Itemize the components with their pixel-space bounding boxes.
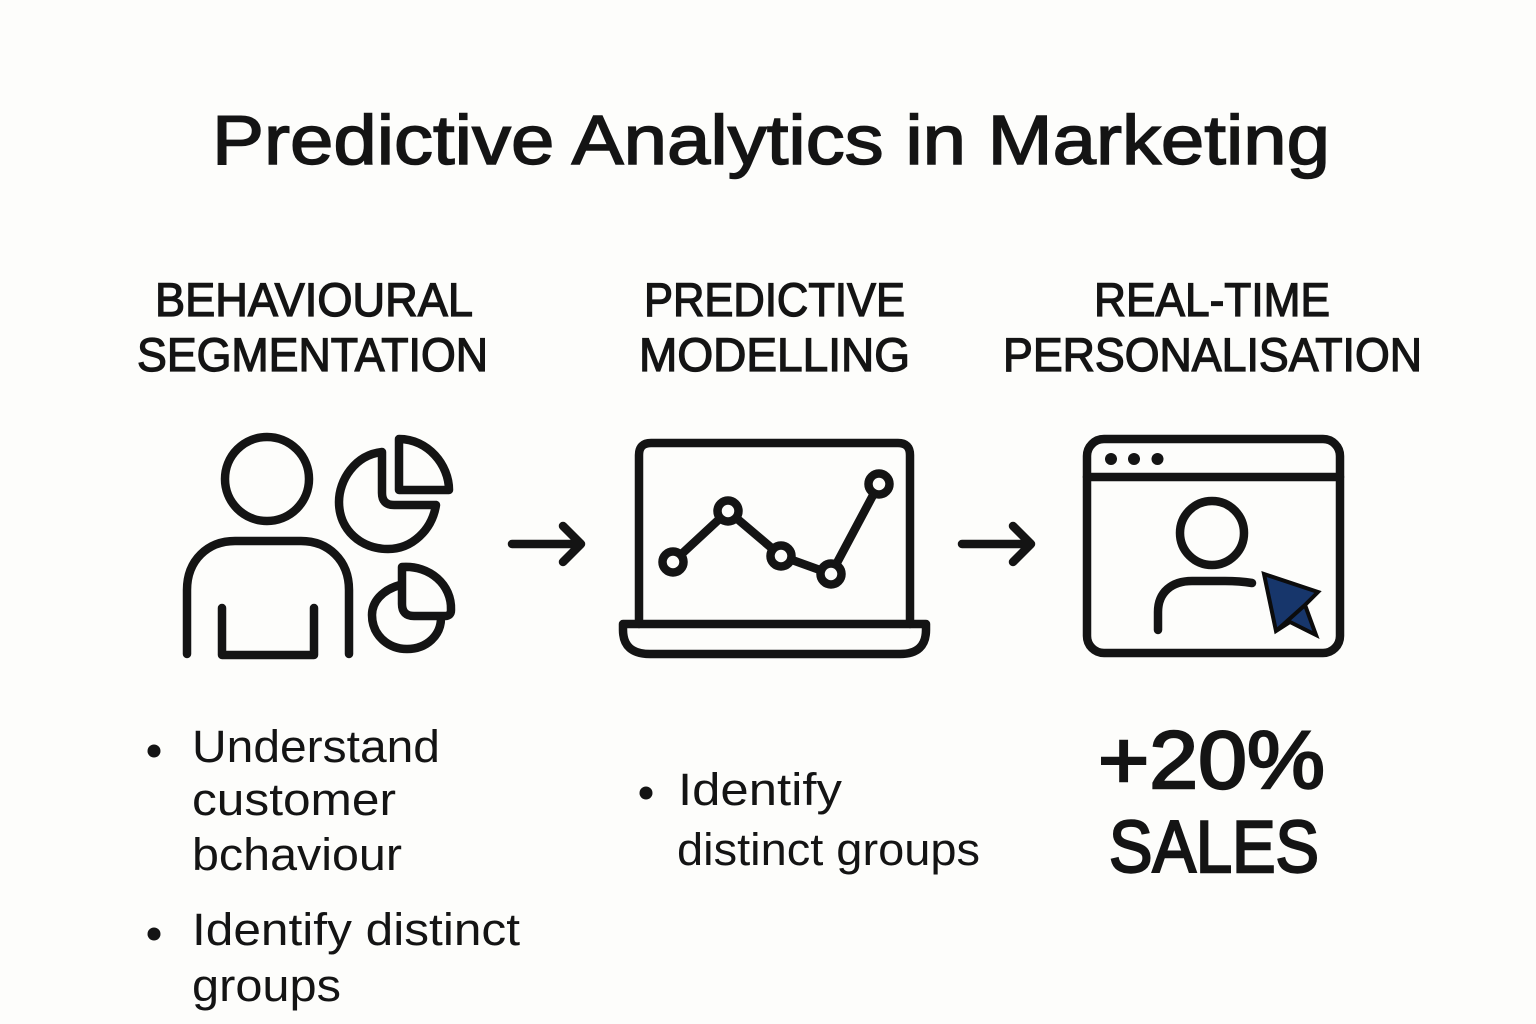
heading: predictive modelling xyxy=(639,273,910,381)
bullet text: identify distinct groups: Identify xyxy=(678,764,843,815)
bullet text: understand customer behaviour xyxy=(192,721,440,880)
large pie chart xyxy=(339,452,436,549)
small pie chart xyxy=(372,585,441,649)
bullet text: understand customer behaviour: Understand xyxy=(192,721,440,772)
person head xyxy=(225,437,309,521)
icon: person with pie charts xyxy=(187,437,451,655)
icon: laptop with line chart xyxy=(623,443,926,654)
bullet text: identify distinct groups: distinct groups xyxy=(677,824,980,875)
heading: real-time personalisation: REAL-TIME xyxy=(1094,273,1330,326)
bullet text: identify distinct groups: groups xyxy=(192,960,341,1011)
heading: real-time personalisation: PERSONALISATION xyxy=(1003,328,1422,381)
bullet text: understand customer behaviour: bchaviour xyxy=(192,829,402,880)
bullet text: identify distinct groups: Identify distinct xyxy=(192,904,521,955)
chart points xyxy=(662,474,890,584)
large pie wedge xyxy=(399,439,449,490)
small pie wedge xyxy=(402,567,451,616)
bullet dot xyxy=(148,928,160,940)
person torso outline xyxy=(222,608,314,655)
stat value: +20% xyxy=(1098,715,1325,806)
bullet list: behavioural segmentation xyxy=(148,721,521,1011)
browser title bar line xyxy=(1087,473,1340,481)
stat label: SALES xyxy=(1109,807,1319,888)
heading: behavioural segmentation: BEHAVIOURAL xyxy=(155,273,473,326)
heading: behavioural segmentation xyxy=(137,273,488,381)
chart line xyxy=(673,484,879,574)
arrow: segmentation to modelling xyxy=(512,526,581,562)
title: Predictive Analytics in Marketing xyxy=(212,101,1330,179)
bullet text: identify distinct groups xyxy=(192,904,521,1011)
arrow: modelling to personalisation xyxy=(962,526,1031,562)
browser dots xyxy=(1105,453,1164,465)
heading: predictive modelling: PREDICTIVE xyxy=(644,273,905,326)
bullet text: understand customer behaviour: customer xyxy=(192,774,396,825)
laptop base xyxy=(623,624,926,654)
person body xyxy=(187,541,349,654)
bullet text: identify distinct groups xyxy=(677,764,980,875)
laptop screen xyxy=(639,443,910,624)
cursor xyxy=(1264,574,1318,635)
browser frame xyxy=(1087,439,1340,653)
bullet list: predictive modelling xyxy=(640,764,980,875)
stat: sales uplift xyxy=(1098,715,1325,888)
user shoulders xyxy=(1158,581,1252,630)
bullet dot xyxy=(640,786,652,800)
heading: real-time personalisation xyxy=(1003,273,1422,381)
heading: predictive modelling: MODELLING xyxy=(639,328,910,381)
heading: behavioural segmentation: SEGMENTATION xyxy=(137,328,488,381)
icon: browser window with user and cursor xyxy=(1087,439,1340,653)
user head xyxy=(1180,501,1244,565)
bullet dot xyxy=(148,744,160,758)
